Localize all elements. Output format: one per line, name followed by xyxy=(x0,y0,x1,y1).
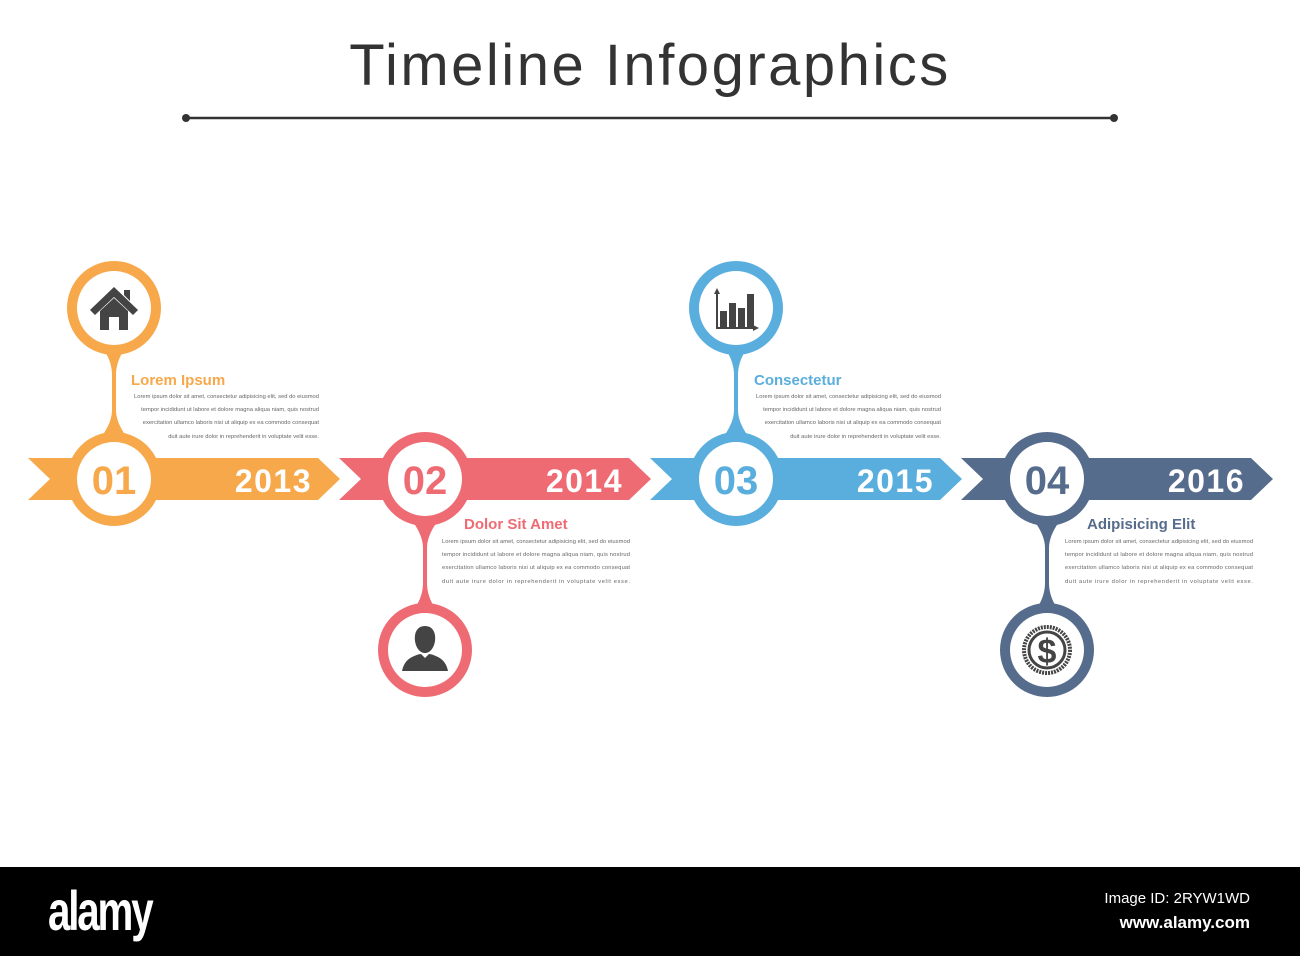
text block 2 xyxy=(442,516,630,585)
number circle 04: 04 xyxy=(1025,459,1070,503)
step 3: 2015 xyxy=(650,261,962,526)
year 2016: 2016 xyxy=(1168,463,1245,499)
connector 3 xyxy=(724,350,748,436)
icon circle: dollar coin xyxy=(1000,603,1094,697)
text block 4: tempor incididunt ut labore et dolore magna aliqua niam, quis nostrud xyxy=(1065,552,1253,558)
text block 3: Consectetur xyxy=(754,372,842,389)
number circle 01 xyxy=(67,432,161,526)
text block 1: duit aute irure dolor in reprehenderit in voluptate velit esse. xyxy=(168,434,319,440)
step 4: 2016 xyxy=(961,432,1273,697)
text block 4: Lorem ipsum dolor sit amet, consectetur adipisicing elit, sed do eiusmod xyxy=(1065,539,1253,545)
text block 1 xyxy=(131,372,319,440)
text block 3: duit aute irure dolor in reprehenderit in voluptate velit esse. xyxy=(790,434,941,440)
text block 3: tempor incididunt ut labore et dolore magna aliqua niam, quis nostrud xyxy=(763,407,941,413)
text block 2: tempor incididunt ut labore et dolore magna aliqua niam, quis nostrud xyxy=(442,552,630,558)
ribbon 1 xyxy=(28,458,340,500)
year 2013: 2013 xyxy=(235,463,312,499)
icon circle: dollar coin: $ xyxy=(1038,633,1057,671)
icon circle: home xyxy=(67,261,161,355)
title underline xyxy=(182,114,1118,122)
text block 4 xyxy=(1065,516,1253,585)
footer bar: www.alamy.com xyxy=(1119,913,1250,932)
number circle 01: 01 xyxy=(92,459,136,503)
text block 2: exercitation ullamco laboris nisi ut aliquip ex ea commodo consequat xyxy=(442,565,630,571)
text block 2: Dolor Sit Amet xyxy=(464,516,568,533)
number circle 04 xyxy=(1000,432,1094,526)
text block 3: Lorem ipsum dolor sit amet, consectetur adipisicing elit, sed do eiusmod xyxy=(756,394,941,400)
connector 2 xyxy=(413,522,437,608)
number circle 02: 02 xyxy=(403,459,447,503)
text block 1: tempor incididunt ut labore et dolore magna aliqua niam, quis nostrud xyxy=(141,407,319,413)
number circle 02 xyxy=(378,432,472,526)
text block 2: duit aute irure dolor in reprehenderit in voluptate velit esse. xyxy=(442,579,630,585)
number circle 03 xyxy=(689,432,783,526)
year 2015: 2015 xyxy=(857,463,934,499)
footer bar xyxy=(0,867,1300,956)
icon circle: bar chart xyxy=(689,261,783,355)
text block 2: Lorem ipsum dolor sit amet, consectetur adipisicing elit, sed do eiusmod xyxy=(442,539,630,545)
ribbon 3 xyxy=(650,458,962,500)
year 2014: 2014 xyxy=(546,463,623,499)
logo: alamy xyxy=(48,881,154,943)
connector 1 xyxy=(102,350,126,436)
text block 3 xyxy=(754,372,941,440)
text block 4: exercitation ullamco laboris nisi ut aliquip ex ea commodo consequat xyxy=(1065,565,1253,571)
image id: Image ID: 2RYW1WD xyxy=(1104,890,1250,907)
number circle 03: 03 xyxy=(714,459,758,503)
connector 4 xyxy=(1035,522,1059,608)
text block 4: duit aute irure dolor in reprehenderit in voluptate velit esse. xyxy=(1065,579,1253,585)
title: Timeline Infographics xyxy=(349,33,951,98)
text block 1: Lorem Ipsum xyxy=(131,372,225,389)
ribbon 4 xyxy=(961,458,1273,500)
text block 3: exercitation ullamco laboris nisi ut aliquip ex ea commodo consequat xyxy=(765,420,941,426)
icon circle: person xyxy=(378,603,472,697)
text block 1: Lorem ipsum dolor sit amet, consectetur adipisicing elit, sed do eiusmod xyxy=(134,394,319,400)
step 2: 2014 xyxy=(339,432,651,697)
ribbon 2 xyxy=(339,458,651,500)
step 1: 2013 xyxy=(28,261,340,526)
text block 4: Adipisicing Elit xyxy=(1087,516,1195,533)
text block 1: exercitation ullamco laboris nisi ut aliquip ex ea commodo consequat xyxy=(143,420,319,426)
